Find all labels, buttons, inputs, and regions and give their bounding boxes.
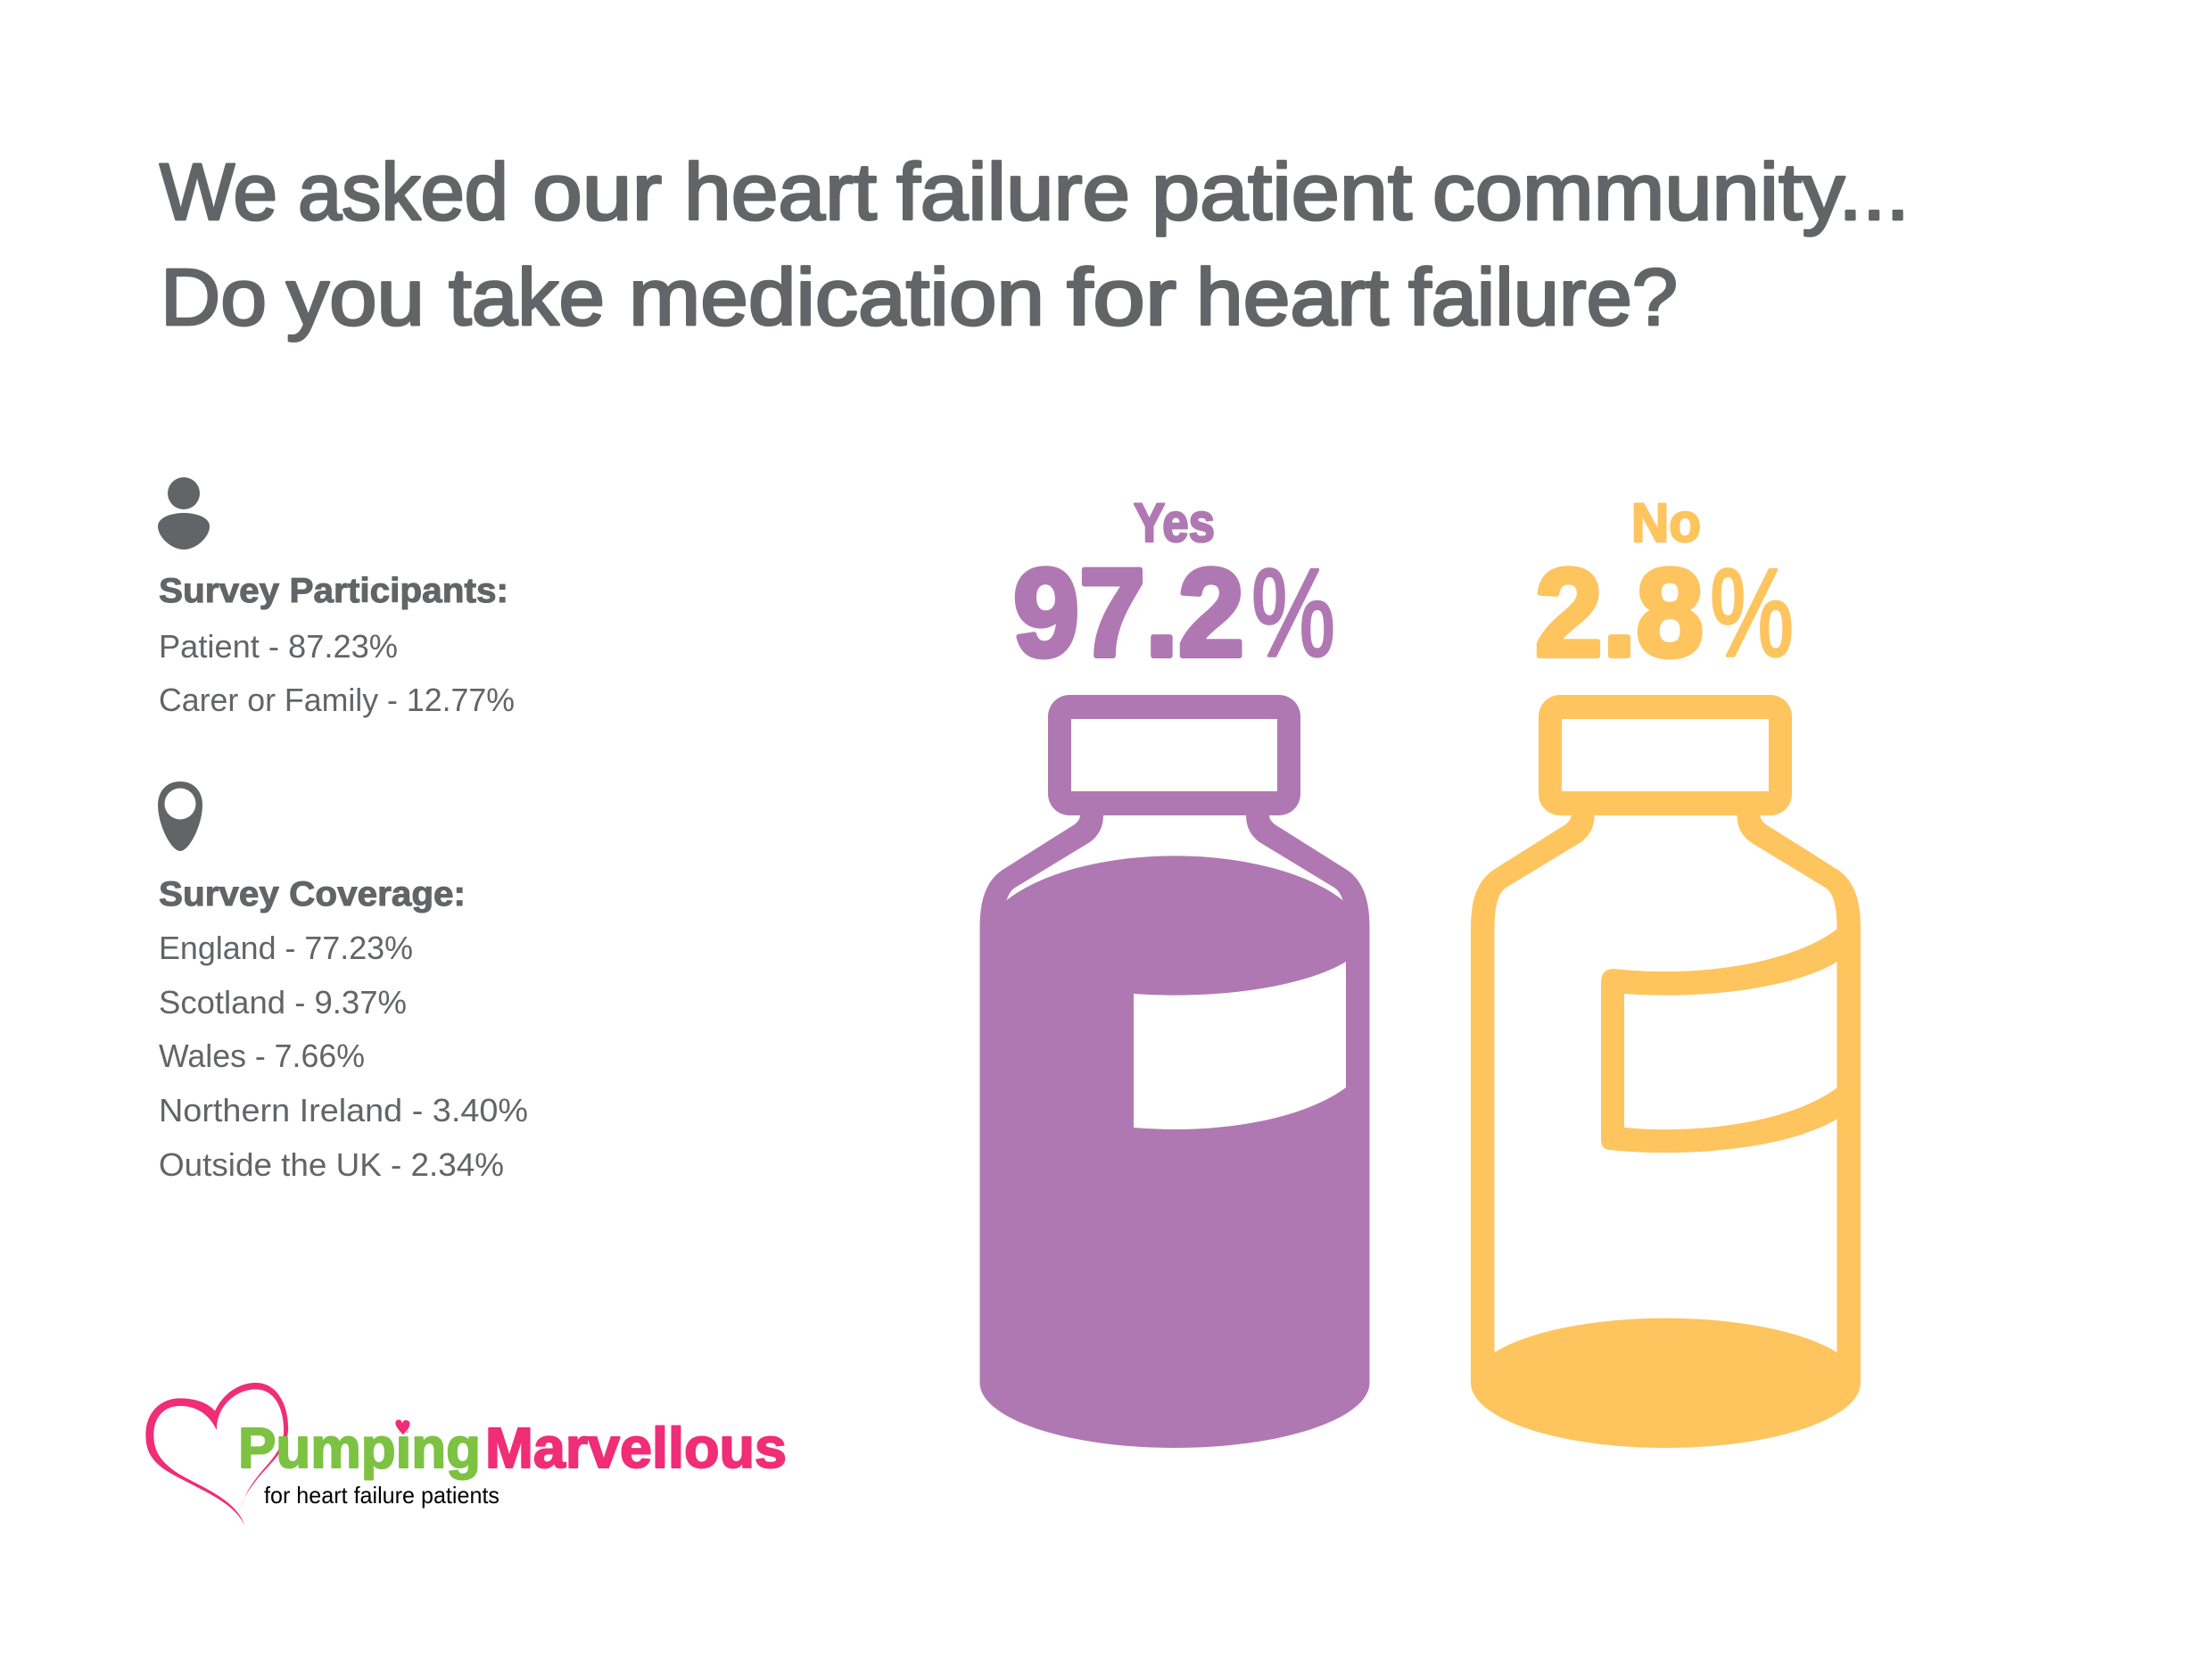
title: take <box>449 253 605 343</box>
icon: location pin <box>158 781 202 851</box>
value: 2.8%: % <box>1710 542 1794 682</box>
title: We <box>160 148 277 237</box>
logo word: Pumping: Pumping <box>238 1416 481 1480</box>
title: our <box>532 148 662 237</box>
participants list <box>159 628 515 718</box>
icon: person <box>158 477 210 550</box>
value: 97.2%: 97.2 <box>1013 542 1244 682</box>
icon: heart outline <box>145 1383 288 1525</box>
logo tagline: for heart failure patients <box>264 1482 499 1509</box>
coverage list: Outside the UK - 2.34% <box>159 1146 504 1183</box>
icon: small heart <box>395 1419 410 1435</box>
title: failure <box>896 148 1130 237</box>
title: heart <box>1196 253 1389 343</box>
title: for <box>1067 253 1176 343</box>
coverage list: Northern Ireland - 3.40% <box>159 1092 528 1128</box>
panel: no result <box>1471 492 1861 1448</box>
heading: survey participants: Survey Participants: <box>159 572 508 610</box>
title: medication <box>629 253 1044 343</box>
title: community... <box>1432 148 1910 237</box>
icon: bottle 2.8% full <box>1471 695 1861 1448</box>
logo word: Marvellous: Marvellous <box>485 1416 787 1480</box>
title: heart <box>684 148 877 237</box>
coverage list <box>159 930 528 1183</box>
title: patient <box>1151 148 1412 237</box>
value: 2.8% <box>1535 542 1794 682</box>
coverage list: England - 77.23% <box>159 930 413 966</box>
label: yes: Yes <box>1134 492 1215 553</box>
title: asked <box>298 148 508 237</box>
panel: survey participants <box>158 477 515 718</box>
heading: survey coverage: Survey Coverage: <box>159 875 466 914</box>
label: no: No <box>1631 492 1701 553</box>
participants list: Patient - 87.23% <box>159 628 398 665</box>
icon: bottle 97.2% full <box>979 695 1370 1448</box>
title: Do <box>161 253 267 343</box>
value: 2.8%: 2.8 <box>1535 542 1704 682</box>
coverage list: Scotland - 9.37% <box>159 984 407 1021</box>
title <box>160 148 1910 343</box>
coverage list: Wales - 7.66% <box>159 1038 365 1074</box>
participants list: Carer or Family - 12.77% <box>159 682 515 718</box>
title: failure? <box>1408 253 1678 343</box>
value: 97.2%: % <box>1251 542 1335 682</box>
panel: yes result <box>979 492 1370 1448</box>
logo: Pumping Marvellous <box>145 1383 787 1525</box>
panel: survey coverage <box>158 781 528 1183</box>
title: you <box>286 253 425 343</box>
